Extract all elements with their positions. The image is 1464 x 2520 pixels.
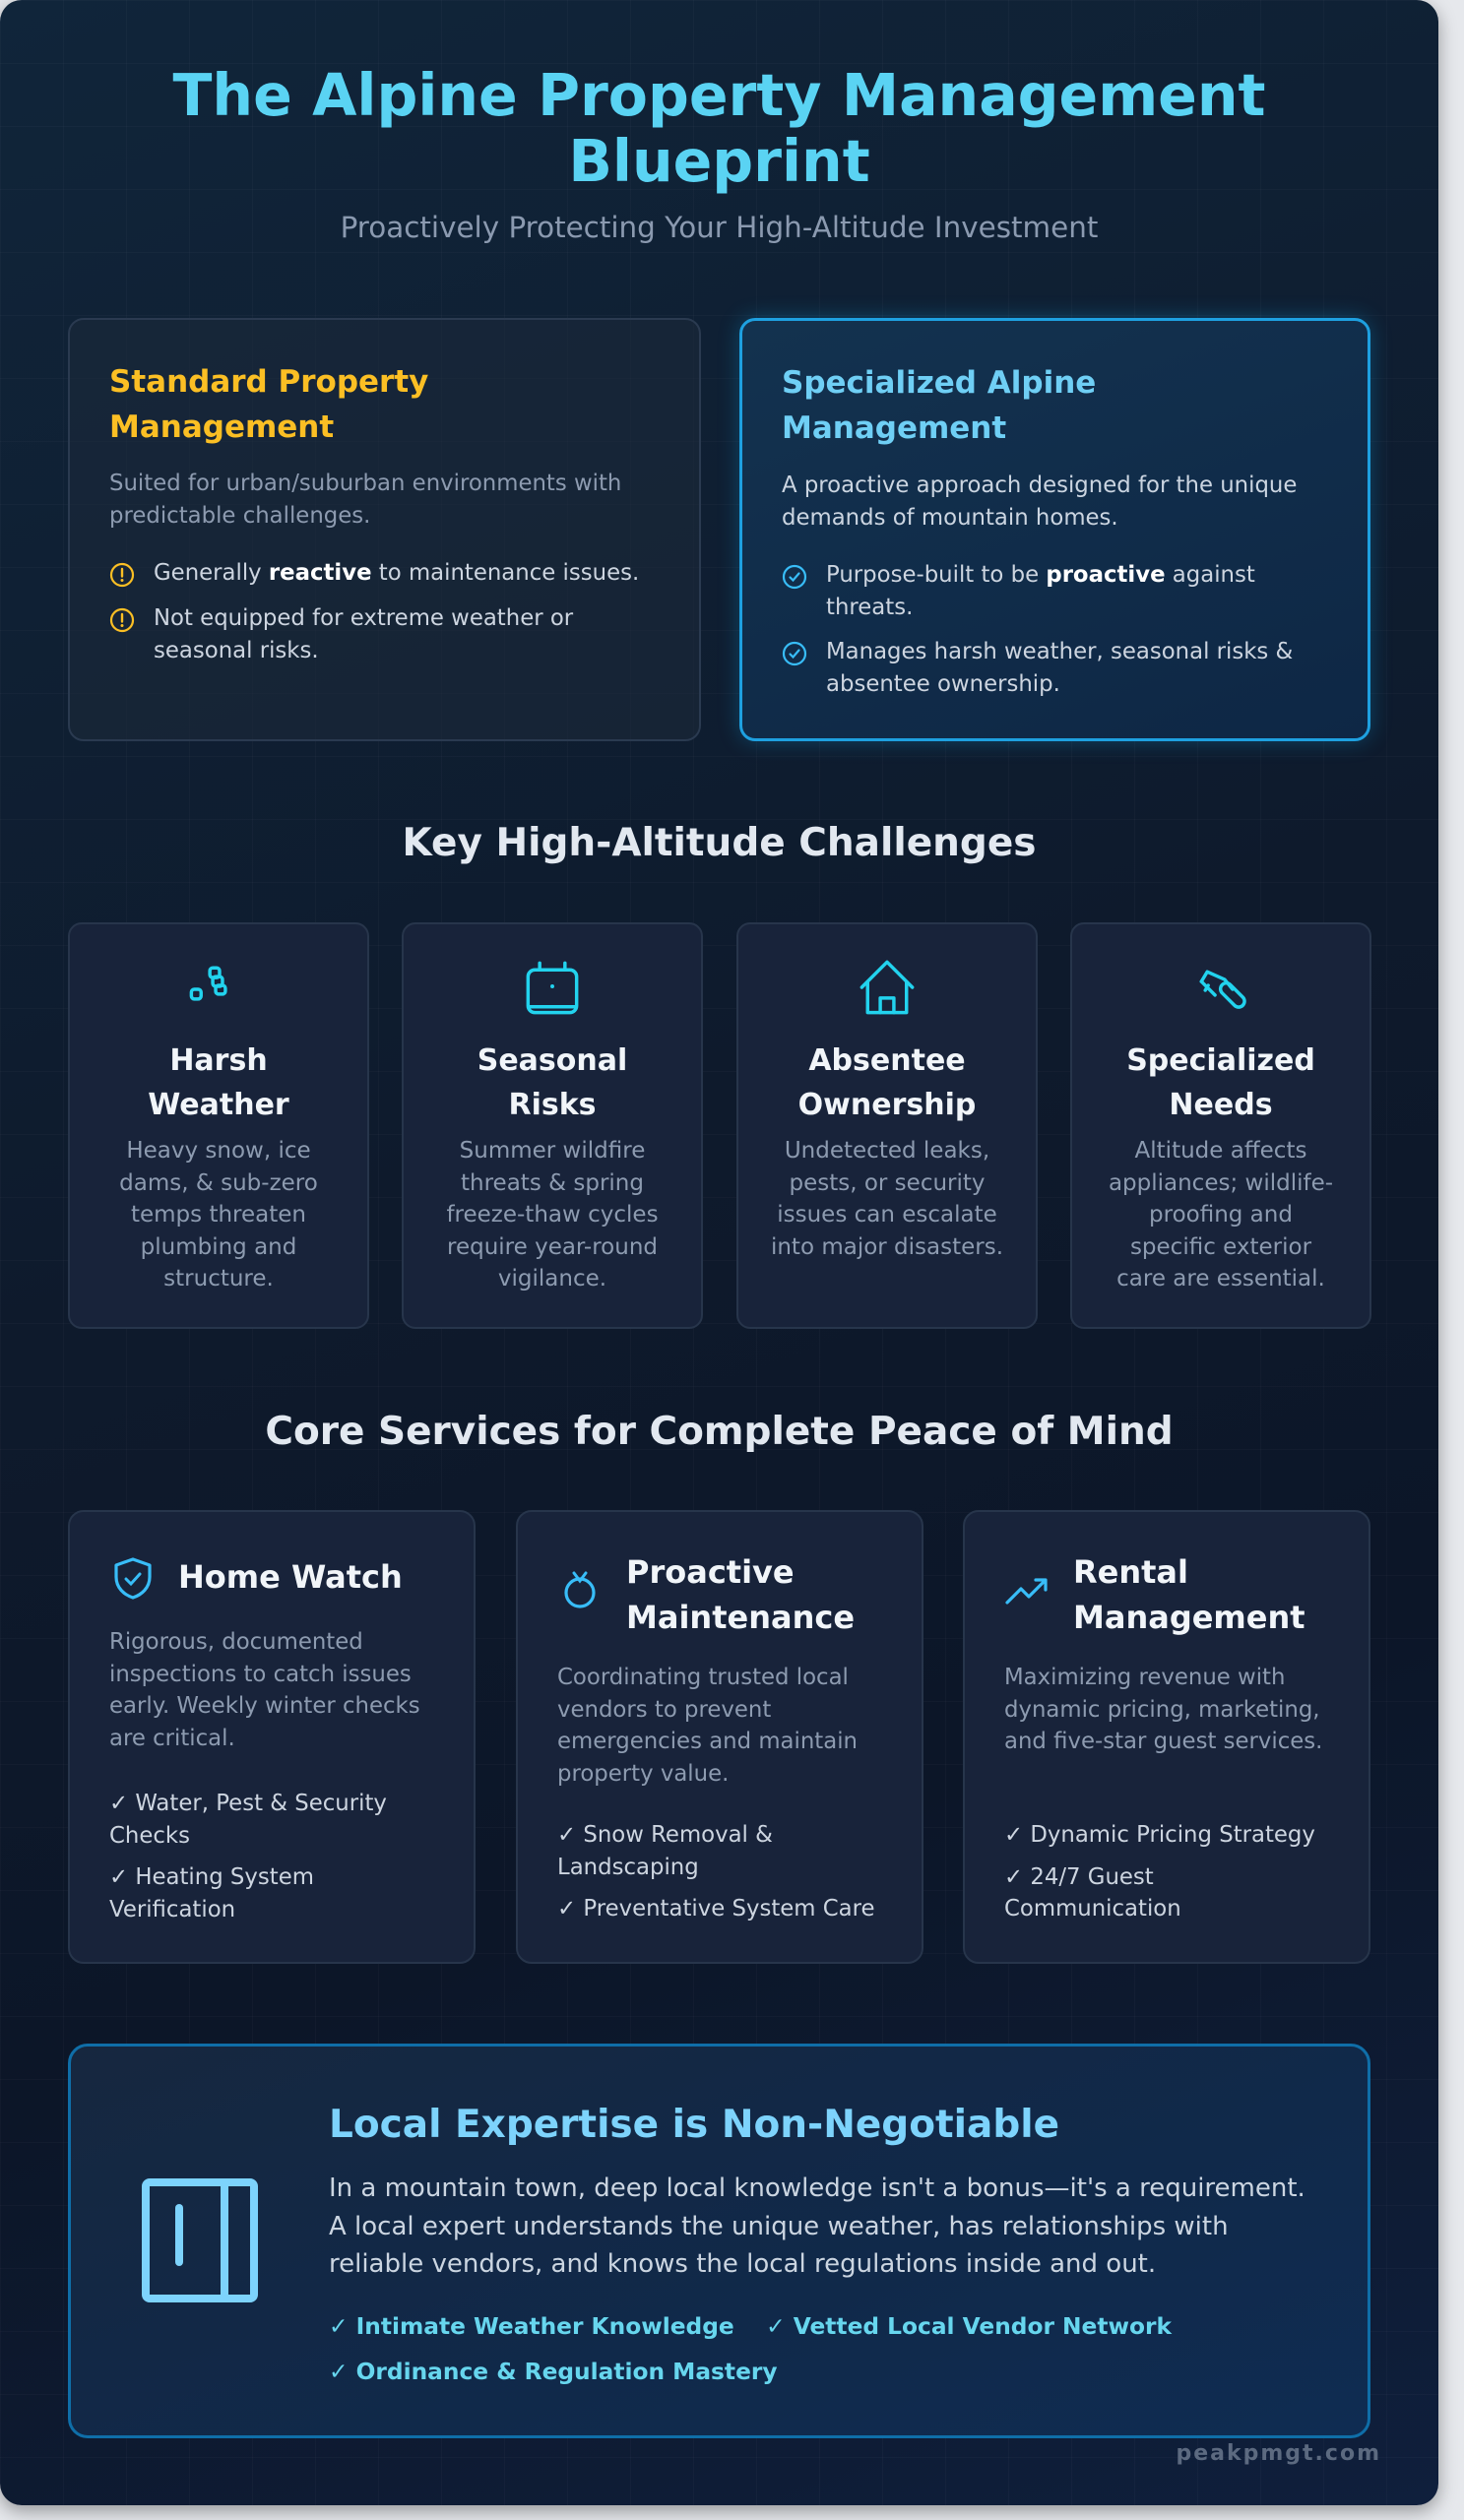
title: The Alpine Property Management bbox=[173, 62, 1265, 129]
title: Proactive bbox=[626, 1553, 795, 1591]
text: Rigorous, documented inspections to catch issues early. Weekly winter checks are critical. bbox=[109, 1629, 420, 1751]
checklist bbox=[1004, 1822, 1315, 1922]
text: Undetected leaks, pests, or security issues can escalate into major disasters. bbox=[771, 1138, 1003, 1260]
panel: absentee ownership bbox=[736, 922, 1038, 1329]
checklist: Checks ✓ Heating System bbox=[109, 1823, 314, 1890]
bullet: reactive: Generally reactive to maintenance issues. bbox=[154, 560, 639, 586]
heading: Local Expertise is Non-Negotiable bbox=[329, 2103, 1059, 2147]
checklist bbox=[557, 1822, 875, 1922]
text: care are essential. bbox=[1116, 1266, 1325, 1292]
title: Rental bbox=[1073, 1553, 1188, 1591]
text: Coordinating trusted local vendors to prevent emergencies and maintain property value. bbox=[557, 1665, 858, 1787]
checklist bbox=[329, 2313, 1172, 2385]
title bbox=[173, 62, 1265, 195]
checklist bbox=[109, 1791, 387, 1922]
icon: shield bbox=[114, 1557, 152, 1600]
panel: home watch bbox=[68, 1510, 476, 1964]
title: Harsh bbox=[169, 1043, 268, 1078]
text: specific exterior bbox=[1130, 1234, 1311, 1260]
checklist: ✓ Water, Pest & Security bbox=[109, 1791, 387, 1816]
title: Maintenance bbox=[626, 1599, 855, 1636]
heading: standard: Management bbox=[109, 410, 334, 445]
title bbox=[1073, 1553, 1305, 1636]
checklist: ✓ Ordinance & Regulation Mastery bbox=[329, 2359, 778, 2385]
title: Risks bbox=[508, 1088, 597, 1122]
title: Ownership bbox=[798, 1088, 976, 1122]
icon: house bbox=[860, 961, 914, 1014]
heading: core services: Core Services for Complete Peace of Mind bbox=[265, 1410, 1174, 1454]
panel: rental management bbox=[963, 1510, 1370, 1964]
heading: specialized: Management bbox=[782, 410, 1006, 446]
bullet: harsh weather: Manages harsh weather, seasonal risks & absentee ownership. bbox=[826, 639, 1293, 697]
checklist: ✓ Intimate Weather Knowledge ✓ Vetted Local Vendor Network bbox=[329, 2313, 1172, 2340]
text: Heavy snow, ice dams, & sub-zero temps threaten plumbing and structure. bbox=[119, 1138, 318, 1292]
text: proofing and bbox=[1149, 1202, 1293, 1228]
bullet: not equipped: Not equipped for extreme weather or seasonal risks. bbox=[154, 605, 573, 663]
title bbox=[477, 1043, 627, 1122]
title: Management bbox=[1073, 1599, 1305, 1636]
text bbox=[1109, 1138, 1333, 1292]
title: Specialized bbox=[1126, 1043, 1315, 1078]
text: appliances; wildlife- bbox=[1109, 1170, 1333, 1196]
title bbox=[1126, 1043, 1315, 1122]
heading: standard bbox=[109, 364, 428, 445]
text: Altitude affects bbox=[1135, 1138, 1306, 1164]
text: Summer wildfire threats & spring freeze-thaw cycles require year-round vigilance. bbox=[446, 1138, 659, 1292]
title: Blueprint bbox=[568, 128, 870, 195]
title: Absentee bbox=[808, 1043, 966, 1078]
icon: timer bbox=[564, 1571, 596, 1608]
checklist: ✓ Snow Removal & bbox=[557, 1822, 773, 1848]
callout: local expertise bbox=[68, 2044, 1370, 2438]
title bbox=[148, 1043, 289, 1122]
checklist: Landscaping ✓ Preventative System Care bbox=[557, 1855, 875, 1922]
description: specialized: A proactive approach designed for the unique demands of mountain homes. bbox=[782, 472, 1297, 531]
footer: website: peakpmgt.com bbox=[1176, 2441, 1381, 2466]
bullet: proactive: Purpose-built to be proactive against threats. bbox=[826, 562, 1255, 620]
checklist: ✓ Dynamic Pricing Strategy ✓ 24/7 Guest bbox=[1004, 1822, 1315, 1890]
panel: proactive maintenance bbox=[516, 1510, 923, 1964]
panel: harsh weather bbox=[68, 922, 369, 1329]
subtitle: Proactively Protecting Your High-Altitude Investment bbox=[341, 211, 1098, 244]
checklist: Verification bbox=[109, 1897, 235, 1922]
heading: standard: Standard Property bbox=[109, 364, 428, 400]
title: Needs bbox=[1169, 1088, 1273, 1122]
description: standard: Suited for urban/suburban environments with predictable challenges. bbox=[109, 471, 621, 529]
text: Maximizing revenue with dynamic pricing, marketing, and five-star guest services. bbox=[1004, 1665, 1322, 1754]
paragraph: In a mountain town, deep local knowledge isn't a bonus—it's a requirement. A local expert understands the unique weather, has relationships with reliable vendors, and knows the local regulations inside and out. bbox=[329, 2174, 1305, 2279]
title bbox=[798, 1043, 976, 1122]
title: Home Watch bbox=[178, 1558, 403, 1596]
heading: challenges: Key High-Altitude Challenges bbox=[402, 821, 1036, 865]
title: Seasonal bbox=[477, 1043, 627, 1078]
checklist: Communication bbox=[1004, 1896, 1181, 1922]
panel: specialized alpine bbox=[739, 318, 1370, 741]
icon: calendar bbox=[526, 961, 579, 1014]
title: Weather bbox=[148, 1088, 289, 1122]
panel: specialized needs bbox=[1070, 922, 1371, 1329]
icon: trending up bbox=[1005, 1578, 1048, 1605]
icon: tool bbox=[1199, 970, 1246, 1009]
heading: specialized: Specialized Alpine bbox=[782, 365, 1096, 401]
panel: seasonal risks bbox=[402, 922, 703, 1329]
panel: standard management bbox=[68, 318, 701, 741]
heading: specialized bbox=[782, 365, 1096, 446]
title bbox=[626, 1553, 855, 1636]
icon: book bbox=[142, 2178, 258, 2302]
icon: snow bbox=[189, 967, 227, 1001]
